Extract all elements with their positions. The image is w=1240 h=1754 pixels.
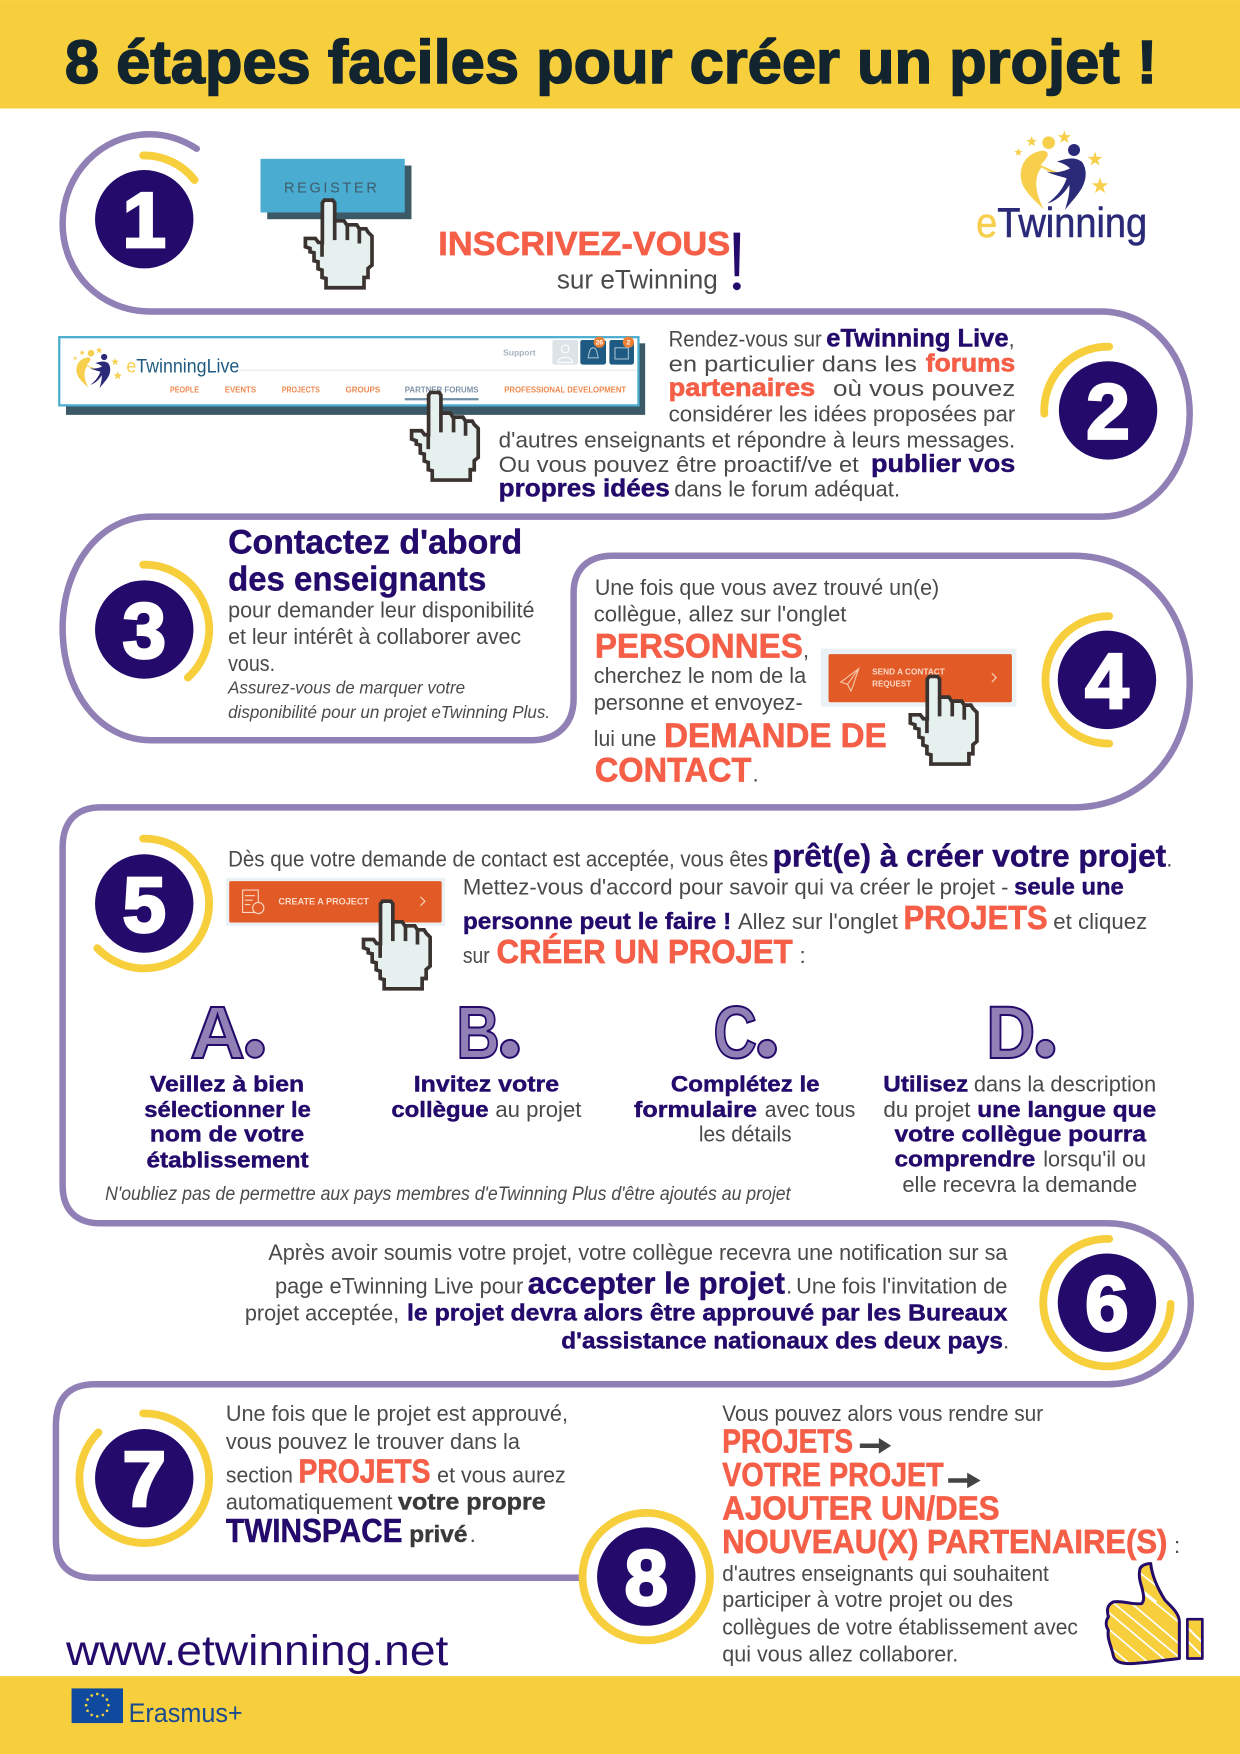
step 2 text: considérer les idées proposées par — [669, 402, 1016, 427]
arrow — [860, 1438, 891, 1454]
etwinning live screenshot: PEOPLE — [170, 386, 199, 395]
step 5 text: Dès que votre demande de contact est acceptée, vous êtes — [228, 847, 768, 872]
step 4 text: . — [752, 762, 759, 787]
step 4 text — [594, 575, 939, 790]
etwinning live screenshot: Support — [503, 348, 536, 358]
step 4 text: DEMANDE DE — [664, 717, 887, 755]
option A: A — [190, 991, 245, 1074]
step 7 text — [226, 1401, 568, 1550]
step 2 text: d'autres enseignants et répondre à leurs messages. — [499, 427, 1015, 452]
step 5 text: PROJETS — [903, 900, 1048, 937]
etwinning live screenshot: PARTNER FORUMS — [405, 386, 479, 395]
icon: hand cursor — [412, 392, 478, 480]
option D: elle recevra la demande — [902, 1172, 1137, 1197]
step 7 text: section — [226, 1463, 293, 1488]
step 2 badge: 2 — [1086, 367, 1130, 455]
step 8 text: participer à votre projet ou des — [722, 1587, 1013, 1612]
step 7 badge — [79, 1413, 209, 1543]
ribbon path connecting the steps — [56, 134, 1191, 1578]
step 8 text: VOTRE PROJET — [722, 1457, 944, 1494]
step 2 text: où vous pouvez — [833, 376, 1015, 401]
step 3 text: disponibilité pour un projet eTwinning Plus. — [228, 702, 550, 722]
step 5 text: seule une — [1014, 874, 1124, 900]
step 4 text: CONTACT — [595, 752, 751, 790]
step 5 badge — [95, 839, 209, 968]
step 3 text — [227, 597, 550, 722]
step 4 text: PERSONNES — [595, 628, 803, 666]
step 3 text: vous. — [228, 651, 275, 676]
step 6 text: le projet devra alors être approuvé par les Bureaux — [407, 1300, 1007, 1326]
step 6 text: . — [1003, 1329, 1009, 1354]
option D — [883, 991, 1156, 1197]
send contact request button: SEND A CONTACT — [872, 667, 945, 676]
option B: Invitez votre — [414, 1071, 559, 1096]
option D: comprendre — [894, 1146, 1035, 1171]
website url: www.etwinning.net — [65, 1628, 449, 1675]
step 6 badge: 6 — [1085, 1260, 1129, 1348]
step 7 badge: 7 — [122, 1435, 166, 1523]
step 2 text: forums — [926, 350, 1015, 377]
step 2 text: Ou vous pouvez être proactif/ve et — [499, 452, 860, 477]
option C: C — [713, 991, 757, 1074]
step 5 text: prêt(e) à créer votre projet — [773, 839, 1167, 874]
step 6 text: Une fois l'invitation de — [796, 1274, 1007, 1299]
etwinning live screenshot: PROJECTS — [282, 386, 320, 395]
step 6 text: accepter le projet — [528, 1268, 785, 1301]
step 5 text: et cliquez — [1053, 909, 1147, 934]
step 1 badge — [95, 155, 195, 268]
option D: votre collègue pourra — [894, 1122, 1147, 1147]
etwinning logo: eTwinning — [976, 200, 1147, 246]
option A: Veillez à bien — [150, 1071, 304, 1096]
step 3 panel — [95, 524, 550, 722]
step 3 heading: Contactez d'abord — [228, 524, 522, 562]
step 5 text: . — [1166, 847, 1172, 872]
step 6 text: . — [786, 1274, 792, 1299]
step 7 text: privé — [409, 1521, 467, 1547]
step 2 text: publier vos — [871, 451, 1015, 478]
step 6 text — [245, 1240, 1009, 1354]
step 2 text: partenaires — [669, 375, 815, 402]
step 1 badge: 1 — [122, 176, 166, 264]
step 2 text: propres idées — [499, 476, 670, 503]
option D: Utilisez — [883, 1071, 968, 1096]
step 3 badge — [95, 565, 209, 679]
step 4 text: personne et envoyez- — [594, 690, 803, 715]
etwinning logo — [976, 130, 1147, 246]
step 2 text: eTwinning Live — [826, 326, 1009, 353]
footer band — [0, 1676, 1240, 1754]
step 8 badge — [583, 1513, 710, 1640]
step 4 text: cherchez le nom de la — [594, 663, 807, 688]
step 2 text: Rendez-vous sur — [669, 327, 822, 352]
icon: hand cursor — [305, 200, 372, 288]
step 7 text: . — [470, 1522, 476, 1547]
step 2 text: dans le forum adéquat. — [674, 477, 900, 502]
step 8 text: d'autres enseignants qui souhaitent — [722, 1561, 1050, 1586]
step 6 text: page eTwinning Live pour — [275, 1274, 524, 1299]
option A — [144, 991, 311, 1172]
step 8 text: qui vous allez collaborer. — [722, 1642, 958, 1667]
step 5 text: Mettez-vous d'accord pour savoir qui va créer le projet - — [463, 875, 1009, 900]
step 7 text: et vous aurez — [437, 1463, 566, 1488]
create a project button — [226, 878, 445, 926]
option C — [634, 991, 855, 1147]
step 5 text: personne peut le faire ! — [463, 908, 731, 934]
step 7 text: automatiquement — [226, 1490, 393, 1515]
step 1 subtext: sur eTwinning — [557, 265, 718, 295]
exclamation mark — [733, 233, 741, 290]
step 6 badge — [1043, 1239, 1171, 1366]
register button: REGISTER — [284, 180, 377, 196]
step 6 text: d'assistance nationaux des deux pays — [561, 1328, 1003, 1354]
step 4 badge: 4 — [1085, 637, 1129, 725]
step 5 text: CRÉER UN PROJET — [496, 933, 793, 971]
option B: au projet — [495, 1097, 582, 1122]
step 7 text: vous pouvez le trouver dans la — [226, 1429, 520, 1454]
step 4 badge — [1045, 616, 1156, 744]
step 5 text: Allez sur l'onglet — [738, 909, 899, 934]
step 3 badge: 3 — [122, 587, 166, 675]
title: 8 étapes faciles pour créer un projet ! — [65, 28, 1157, 97]
step 3 text: et leur intérêt à collaborer avec — [228, 624, 521, 649]
etwinning live screenshot: 26 — [596, 339, 603, 346]
step 8 text: NOUVEAU(X) PARTENAIRE(S) — [722, 1524, 1167, 1561]
step 8 panel — [583, 1401, 1205, 1667]
option D: D — [986, 991, 1035, 1074]
step 8 text: Vous pouvez alors vous rendre sur — [722, 1401, 1044, 1426]
step 2 panel — [59, 326, 1157, 503]
step 5 badge: 5 — [122, 860, 166, 948]
step 2 text — [499, 326, 1016, 503]
send contact request button: REQUEST — [872, 680, 912, 689]
option D: une langue que — [977, 1097, 1156, 1122]
step 8 text — [722, 1401, 1180, 1667]
etwinning live screenshot: eTwinningLive — [126, 356, 239, 377]
step 4 text: , — [803, 638, 809, 663]
etwinning live screenshot — [59, 337, 645, 415]
step 2 text: en particulier dans les — [669, 351, 917, 376]
step 5 text: sur — [463, 943, 490, 968]
step 4 panel — [594, 575, 1156, 790]
step 3 text: Assurez-vous de marquer votre — [227, 677, 465, 697]
option D: lorsqu'il ou — [1043, 1146, 1146, 1171]
icon: hand cursor — [364, 901, 430, 989]
step 6 text: Après avoir soumis votre projet, votre collègue recevra une notification sur sa — [268, 1240, 1008, 1265]
etwinning live screenshot: GROUPS — [346, 386, 380, 395]
option B: collègue — [391, 1097, 489, 1122]
step 8 text: : — [1174, 1533, 1180, 1558]
header band — [0, 0, 1240, 109]
step 6 text: projet acceptée, — [245, 1301, 399, 1326]
option D: dans la description — [974, 1071, 1156, 1096]
step 7 panel — [79, 1401, 568, 1550]
send contact request button — [821, 649, 1016, 707]
option A: établissement — [146, 1147, 309, 1172]
option A: nom de votre — [150, 1122, 304, 1147]
step 7 text: Une fois que le projet est approuvé, — [226, 1401, 568, 1426]
step 2 text: , — [1009, 327, 1015, 352]
erasmus plus logo: Erasmus+ — [129, 1698, 243, 1728]
step 5 panel — [95, 839, 1172, 1205]
step 3 text: pour demander leur disponibilité — [228, 597, 534, 622]
icon: hand cursor — [910, 676, 977, 764]
step 8 text: PROJETS — [722, 1423, 853, 1460]
step 3 heading — [228, 524, 522, 598]
option A: sélectionner le — [144, 1097, 311, 1122]
option C: formulaire — [634, 1097, 757, 1122]
step 7 text: TWINSPACE — [226, 1513, 403, 1550]
step 5 text — [228, 839, 1172, 971]
option C: avec tous — [765, 1097, 855, 1122]
option C: Complétez le — [671, 1071, 820, 1096]
option C: les détails — [699, 1122, 792, 1147]
create a project button: CREATE A PROJECT — [278, 897, 370, 907]
step 5 note: N'oubliez pas de permettre aux pays membres d'eTwinning Plus d'être ajoutés au projet — [105, 1184, 791, 1205]
step 3 heading: des enseignants — [228, 560, 486, 598]
option B — [391, 991, 582, 1122]
step 1 panel — [95, 155, 741, 295]
step 8 badge: 8 — [625, 1534, 668, 1622]
option D: du projet — [883, 1097, 971, 1122]
step 4 text: Une fois que vous avez trouvé un(e) — [595, 575, 939, 600]
arrow — [948, 1473, 981, 1488]
step 8 text: collègues de votre établissement avec — [722, 1615, 1078, 1640]
step 6 panel — [245, 1239, 1171, 1366]
register button — [261, 159, 411, 219]
icon: thumbs up — [1100, 1560, 1205, 1667]
step 1 heading: INSCRIVEZ-VOUS — [438, 226, 730, 263]
option B: B — [456, 991, 500, 1074]
erasmus plus logo — [72, 1688, 243, 1728]
step 4 text: collègue, allez sur l'onglet — [594, 602, 847, 627]
step 4 text: lui une — [594, 726, 656, 751]
step 5 text: : — [799, 943, 806, 968]
etwinning live screenshot: EVENTS — [225, 386, 256, 395]
step 8 text: AJOUTER UN/DES — [722, 1491, 1000, 1528]
step 7 text: PROJETS — [299, 1454, 430, 1491]
etwinning live screenshot: PROFESSIONAL DEVELOPMENT — [504, 386, 626, 395]
step 7 text: votre propre — [398, 1489, 546, 1515]
step 2 badge — [1044, 347, 1157, 460]
etwinning live screenshot: 2 — [627, 339, 631, 346]
